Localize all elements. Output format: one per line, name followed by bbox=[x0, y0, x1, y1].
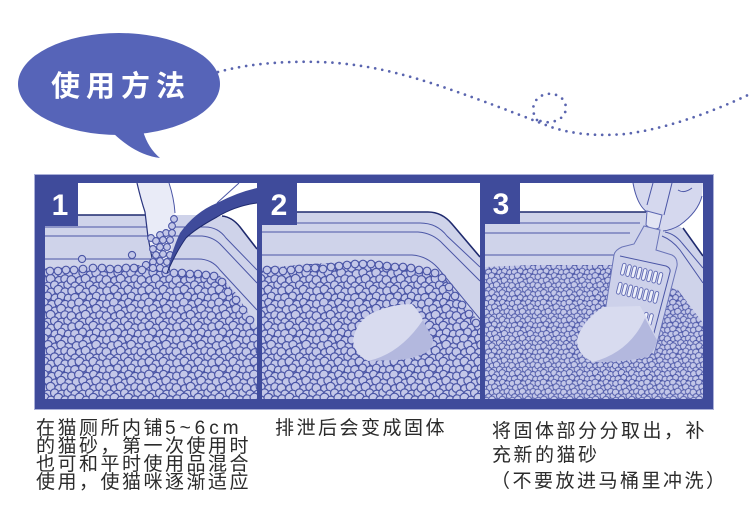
litter clump bbox=[353, 304, 433, 361]
caption: step 3 bbox=[491, 420, 728, 492]
caption: step 1: 在猫厕所内铺5~6cm bbox=[36, 417, 243, 439]
pile top pebbles bbox=[263, 260, 480, 327]
caption: step 1: 使用，使猫咪逐渐适应 bbox=[36, 471, 251, 493]
number badge 2 bbox=[262, 183, 297, 225]
litter tray bbox=[45, 215, 257, 327]
scoop slots: row 1 bbox=[620, 263, 663, 285]
panel 2: clump after use bbox=[262, 183, 480, 400]
number badge 2: 2 bbox=[271, 189, 287, 222]
scoop bbox=[605, 226, 677, 355]
litter pile bbox=[485, 265, 703, 400]
tray outlines bbox=[45, 215, 257, 310]
scoop slots: row 3 bbox=[644, 312, 654, 326]
caption: step 2: 排泄后会变成固体 bbox=[275, 417, 447, 439]
panel 1: pour litter bbox=[45, 183, 257, 400]
dotted flight path bbox=[218, 62, 748, 135]
pouring bag bbox=[137, 183, 175, 262]
number badge 1 bbox=[45, 183, 78, 226]
panel 3: scoop clump bbox=[485, 183, 703, 400]
litter tray bbox=[262, 212, 480, 321]
scoop slots: row 2 bbox=[616, 282, 659, 304]
litter tray bbox=[485, 212, 703, 323]
number badge 1: 1 bbox=[52, 189, 68, 222]
caption: step 3: 充新的猫砂 bbox=[492, 444, 600, 466]
caption: step 3: 将固体部分分取出，补 bbox=[492, 420, 707, 442]
falling litter pebbles bbox=[46, 216, 254, 324]
tray outlines bbox=[262, 212, 480, 319]
number badge 3: 3 bbox=[493, 188, 509, 221]
caption: step 1: 的猫砂，第一次使用时 bbox=[36, 435, 251, 457]
steps frame bbox=[34, 174, 714, 410]
tray outlines bbox=[485, 212, 703, 283]
litter pile bbox=[45, 265, 257, 400]
speech bubble heading bbox=[18, 33, 220, 158]
caption: step 1: 也可和平时使用品混合 bbox=[36, 453, 251, 475]
blue bag lip bbox=[167, 188, 257, 273]
litter clump on scoop bbox=[577, 306, 657, 362]
caption: step 1 bbox=[36, 417, 251, 493]
speech bubble heading: 使用方法 bbox=[51, 70, 191, 103]
caption: step 3: （不要放进马桶里冲洗） bbox=[491, 470, 728, 492]
litter pile bbox=[262, 261, 480, 400]
hand bbox=[633, 183, 703, 231]
number badge 3 bbox=[485, 183, 520, 224]
